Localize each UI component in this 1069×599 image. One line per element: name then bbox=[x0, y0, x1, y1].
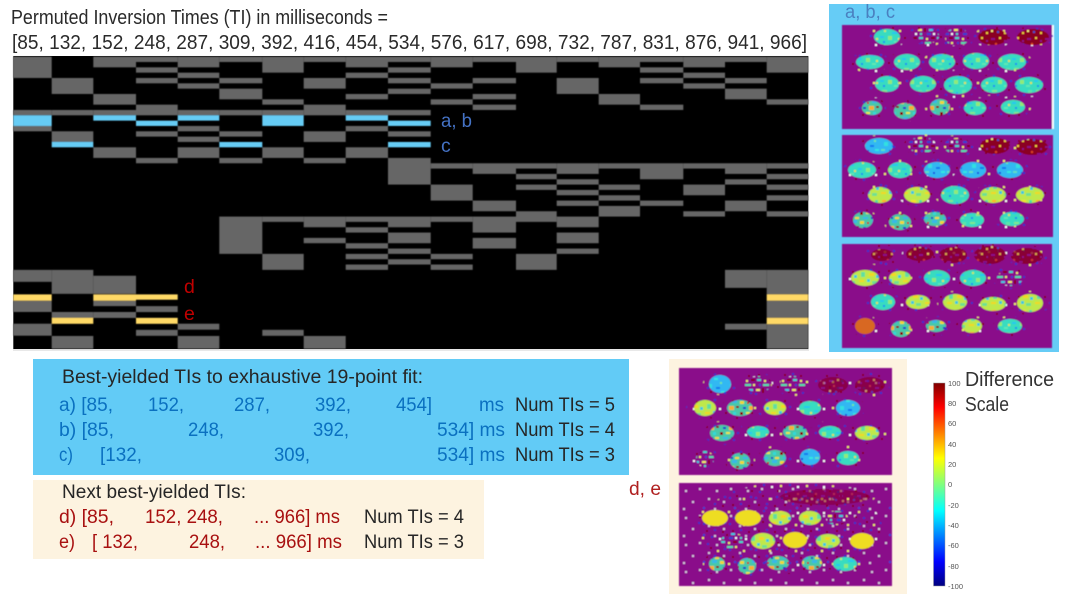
row a bbox=[59, 394, 615, 416]
row a: 454] bbox=[396, 394, 432, 416]
label: e: e bbox=[184, 303, 195, 325]
panel: d, e maps bbox=[669, 359, 907, 594]
row c: 534] ms bbox=[437, 444, 505, 466]
colorbar tick labels: 40 bbox=[948, 440, 956, 449]
column 14 bbox=[557, 57, 599, 254]
colorbar title bbox=[965, 369, 1054, 416]
row a: a) [85, bbox=[59, 394, 113, 416]
column 12 bbox=[473, 57, 516, 249]
panel: a, b, c maps bbox=[829, 2, 1059, 352]
column 16 bbox=[640, 57, 683, 206]
row d bbox=[59, 506, 464, 528]
colorbar tick labels: 100 bbox=[948, 379, 961, 388]
title: [85, 132, 152, 248, 287, 309, 392, 416, 454, 534, 576, 617, 698, 732, 787, 831, 876, 941, 966] bbox=[12, 32, 807, 54]
row a: Num TIs = 5 bbox=[515, 394, 615, 416]
colorbar tick labels: 0 bbox=[948, 480, 952, 489]
row a: 152, bbox=[148, 394, 184, 416]
colorbar title: Scale bbox=[965, 394, 1009, 416]
difference map c bbox=[842, 244, 1052, 348]
column 9 bbox=[346, 57, 388, 270]
row e: ... 966] ms bbox=[255, 531, 342, 553]
difference map e bbox=[679, 482, 892, 586]
column 19 bbox=[767, 57, 808, 349]
difference map d bbox=[679, 368, 892, 475]
row b: 392, bbox=[313, 419, 349, 441]
column 13 bbox=[516, 57, 557, 270]
difference map b bbox=[842, 134, 1053, 237]
row d: ... 966] ms bbox=[254, 506, 340, 528]
column 18 bbox=[725, 57, 767, 330]
row b bbox=[59, 419, 615, 441]
row c: 309, bbox=[274, 444, 310, 466]
label: d, e: d, e bbox=[629, 478, 661, 500]
column 10 bbox=[388, 57, 431, 265]
row b: b) [85, bbox=[59, 419, 114, 441]
row e: e) bbox=[59, 531, 75, 553]
row d: d) [85, bbox=[59, 506, 114, 528]
colorbar tick labels: -40 bbox=[948, 521, 959, 530]
row e: [ 132, bbox=[92, 531, 138, 553]
colorbar title: Difference bbox=[965, 369, 1054, 391]
row a: ms bbox=[479, 394, 504, 416]
row e: Num TIs = 3 bbox=[364, 531, 464, 553]
column 17 bbox=[683, 57, 725, 217]
column 2 bbox=[52, 78, 93, 349]
row d: Num TIs = 4 bbox=[364, 506, 464, 528]
row a: 287, bbox=[234, 394, 270, 416]
row a: 392, bbox=[315, 394, 351, 416]
colorbar tick labels: 80 bbox=[948, 399, 956, 408]
label: d: d bbox=[184, 276, 195, 298]
colorbar tick labels: 20 bbox=[948, 460, 956, 469]
row c: Num TIs = 3 bbox=[515, 444, 615, 466]
colorbar tick labels: -100 bbox=[948, 582, 963, 591]
row e: 248, bbox=[189, 531, 225, 553]
column 4 bbox=[136, 57, 178, 336]
column 6 bbox=[219, 57, 262, 254]
heatmap: permuted inversion time combinations bbox=[13, 56, 809, 351]
column 15 bbox=[599, 57, 640, 217]
title: Permuted Inversion Times (TI) in milliseconds = bbox=[11, 7, 388, 29]
heading: Best-yielded TIs to exhaustive 19-point fit: bbox=[62, 366, 423, 388]
column 11 bbox=[431, 57, 473, 270]
row e bbox=[59, 531, 464, 553]
row b: Num TIs = 4 bbox=[515, 419, 615, 441]
column 1 bbox=[13, 57, 52, 336]
column 3 bbox=[93, 57, 136, 318]
column 5 bbox=[178, 57, 219, 349]
row c: c) bbox=[59, 444, 73, 466]
row b: 248, bbox=[188, 419, 224, 441]
panel label: a, b, c bbox=[845, 2, 895, 23]
heading: Next best-yielded TIs: bbox=[62, 481, 246, 503]
row b: 534] ms bbox=[437, 419, 505, 441]
colorbar tick labels: -80 bbox=[948, 562, 959, 571]
label: c: c bbox=[441, 135, 451, 157]
column 8 bbox=[304, 57, 346, 349]
colorbar tick labels: -20 bbox=[948, 501, 959, 510]
column 7 bbox=[262, 57, 304, 336]
panel: best-yielded TIs bbox=[33, 359, 629, 475]
colorbar tick labels: -60 bbox=[948, 541, 959, 550]
row d: 152, 248, bbox=[145, 506, 223, 528]
row c bbox=[59, 444, 615, 466]
difference map a bbox=[842, 25, 1054, 129]
panel: next best-yielded TIs bbox=[33, 480, 484, 559]
colorbar tick labels bbox=[948, 379, 963, 591]
colorbar: difference scale bbox=[934, 379, 963, 591]
label: a, b: a, b bbox=[441, 110, 472, 132]
title bbox=[11, 7, 807, 54]
colorbar tick labels: 60 bbox=[948, 419, 956, 428]
row c: [132, bbox=[100, 444, 142, 466]
